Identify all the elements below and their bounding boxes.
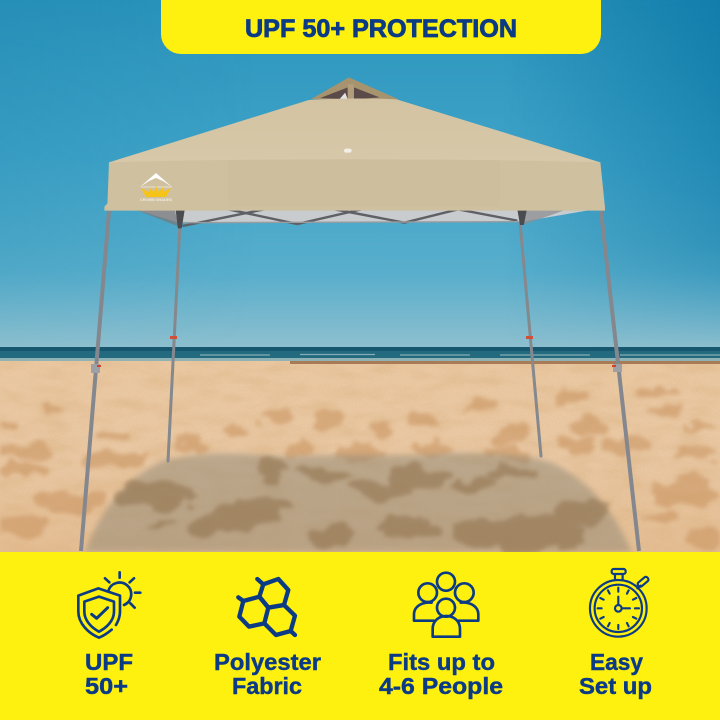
icon: hexagon molecule bbox=[238, 579, 295, 635]
label: Polyester bbox=[214, 649, 321, 675]
canopy shadow on sand bbox=[85, 453, 632, 552]
icon: shield and sun bbox=[78, 572, 140, 638]
feature: Polyester Fabric bbox=[214, 579, 328, 699]
label: Fits up to bbox=[388, 649, 495, 675]
icon: stopwatch bbox=[590, 569, 649, 637]
label: Set up bbox=[579, 673, 652, 699]
label: 50+ bbox=[85, 673, 128, 699]
top banner bbox=[161, 0, 601, 54]
sea bbox=[0, 347, 720, 362]
canopy valance bbox=[104, 159, 605, 211]
canopy logo bbox=[140, 173, 172, 202]
front tent poles bbox=[81, 211, 639, 551]
label: 4-6 People bbox=[379, 673, 503, 699]
canopy roof bbox=[109, 98, 600, 167]
label: Easy bbox=[590, 649, 643, 675]
canopy logo: CROWN SHADES bbox=[140, 197, 172, 202]
label: Fabric bbox=[232, 673, 302, 699]
label: UPF bbox=[85, 649, 133, 675]
banner heading: UPF 50+ PROTECTION bbox=[245, 15, 517, 43]
feature: Fits up to 4-6 People bbox=[379, 573, 503, 699]
sand beach bbox=[0, 361, 720, 552]
sky background bbox=[0, 0, 720, 350]
feature: UPF 50+ bbox=[78, 572, 140, 699]
canopy tent bbox=[104, 77, 605, 228]
icon: group of people bbox=[414, 573, 478, 637]
feature: Easy Set up bbox=[579, 569, 652, 699]
canopy underside and truss bbox=[135, 207, 594, 228]
back tent poles bbox=[168, 222, 541, 461]
bottom feature panel bbox=[0, 552, 720, 720]
canopy peak vent bbox=[311, 77, 399, 101]
